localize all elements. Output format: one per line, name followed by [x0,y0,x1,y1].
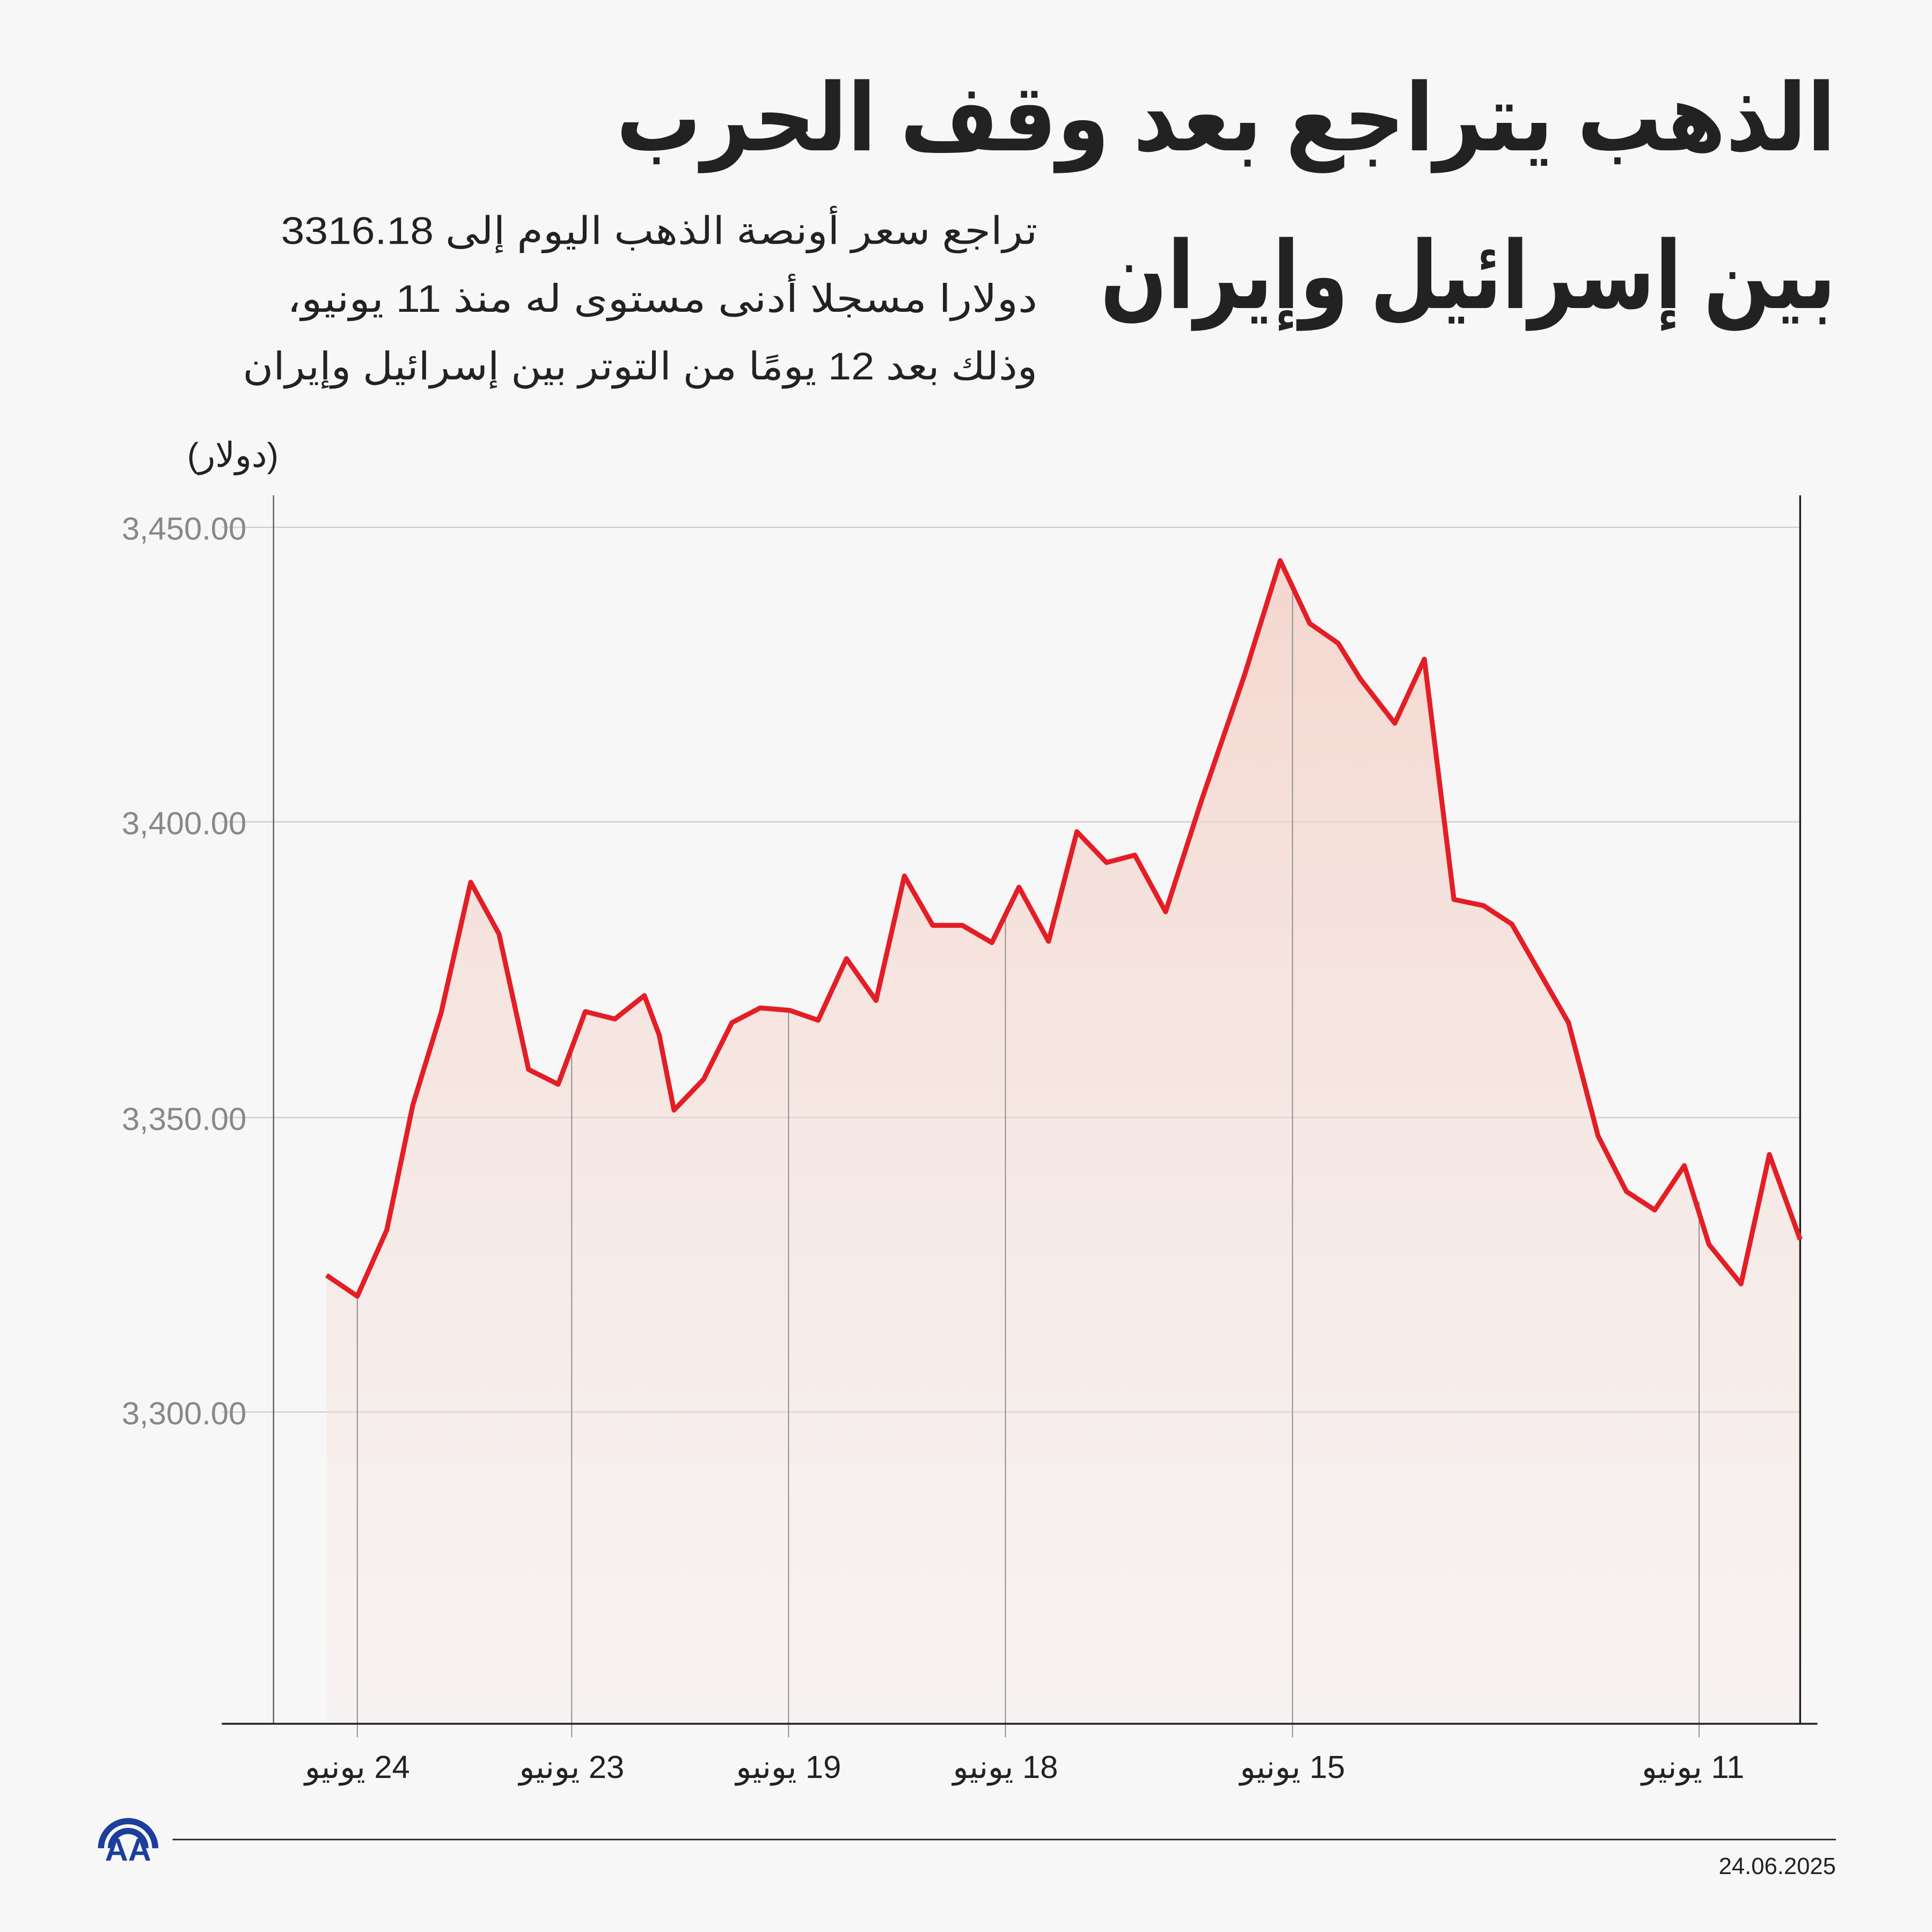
unit label: (دولار) [187,436,279,475]
title: الذهب يتراجع بعد وقف الحرب [616,65,1836,173]
icon: AA logo [101,1821,155,1868]
line chart [122,495,1817,1737]
icon: AA logo: AA [105,1832,151,1868]
area fill [326,561,1800,1724]
footer divider [172,1839,1836,1840]
subtitle text block: دولارا مسجلا أدنى مستوى له منذ 11 يونيو، [287,274,1037,321]
x axis labels: 15 يونيو [1238,1749,1345,1786]
y axis labels: 3,350.00 [122,1101,246,1137]
y axis labels: 3,450.00 [122,511,246,547]
subtitle text block: وذلك بعد 12 يومًا من التوتر بين إسرائيل وإيران [243,346,1037,389]
x axis labels: 23 يونيو [517,1749,624,1786]
y axis labels: 3,300.00 [122,1395,246,1431]
title [616,65,1836,331]
x axis labels: 19 يونيو [734,1749,841,1786]
x axis labels: 18 يونيو [952,1749,1058,1786]
subtitle text block: تراجع سعر أونصة الذهب اليوم إلى 3316.18 [281,206,1037,254]
x axis labels [303,1749,1744,1786]
subtitle text block [243,206,1037,389]
date: 24.06.2025 [1719,1854,1836,1879]
y axis labels [122,511,246,1431]
y axis labels: 3,400.00 [122,805,246,841]
x axis labels: 24 يونيو [303,1749,410,1786]
x axis labels: 11 يونيو [1640,1749,1744,1786]
